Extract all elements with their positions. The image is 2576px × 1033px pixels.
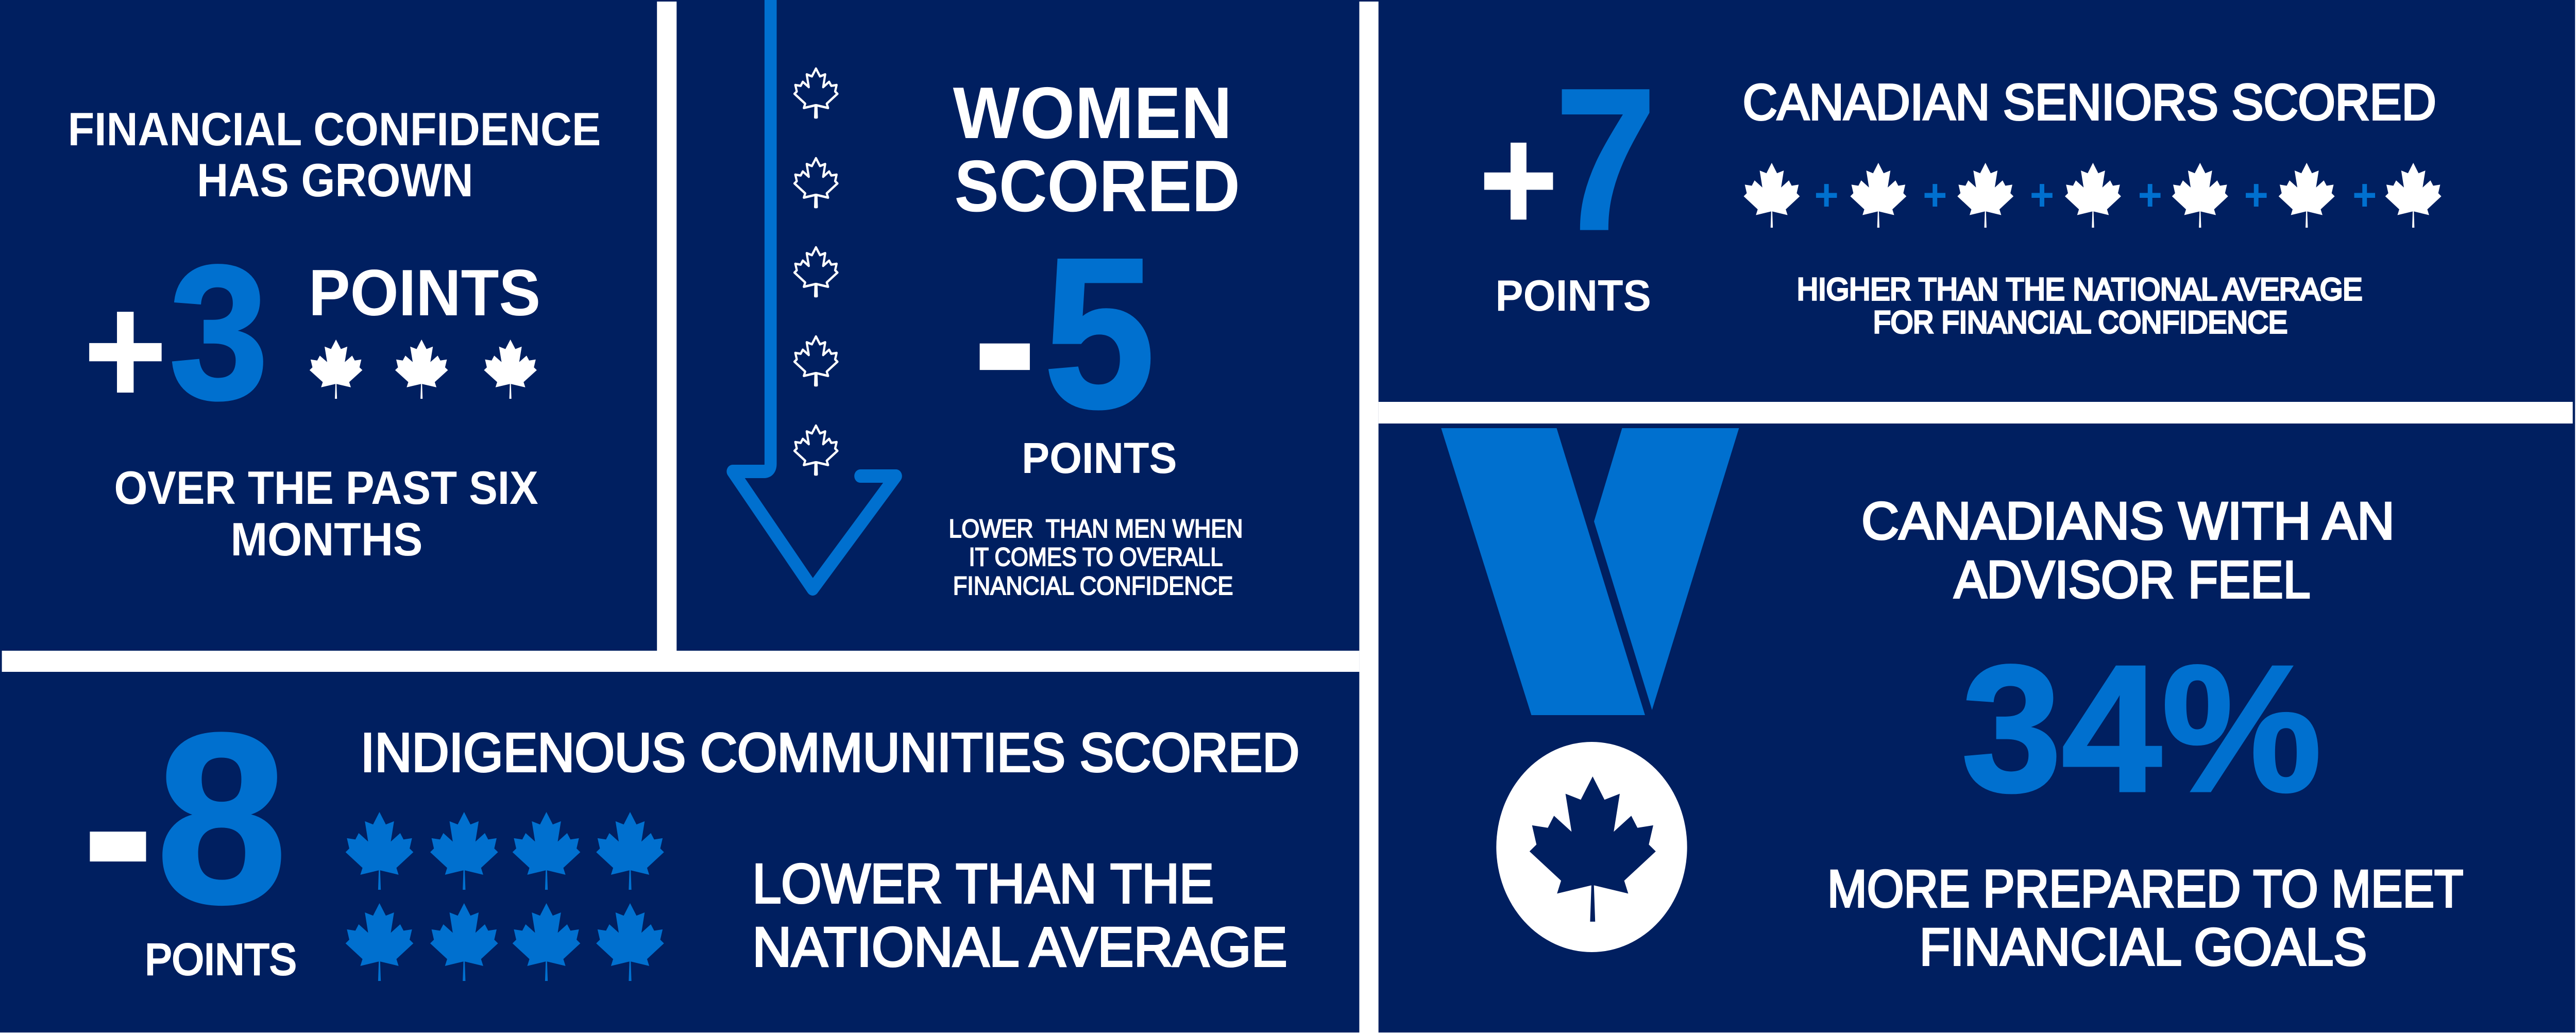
heading: women scored: SCORED — [954, 145, 1240, 227]
panel: financial confidence grown — [68, 103, 601, 566]
icon: medal ribbon — [1441, 428, 1739, 715]
plus sign: + — [1479, 95, 1558, 263]
plus sign: + — [83, 262, 167, 438]
text: higher than national average: FOR FINANCIAL CONFIDENCE — [1873, 306, 2287, 340]
points label: POINTS — [1022, 434, 1177, 482]
text: lower than the national average: LOWER THAN THE — [752, 853, 1214, 915]
figure: 34 percent: 34% — [1961, 628, 2321, 829]
text: over the past six months — [114, 462, 538, 566]
points label: POINTS — [145, 935, 296, 984]
text: more prepared to meet financial goals: MORE PREPARED TO MEET — [1827, 859, 2463, 918]
panel: women scored — [733, 0, 1243, 601]
heading: indigenous communities scored: INDIGENOUS COMMUNITIES SCORED — [361, 722, 1299, 783]
icons: outlined maple leaves — [794, 69, 838, 475]
text: more prepared to meet financial goals: FINANCIAL GOALS — [1920, 918, 2367, 976]
blue plus signs: + — [2138, 171, 2162, 220]
blue plus signs: + — [2352, 171, 2377, 220]
minus sign: - — [973, 218, 1037, 458]
text: over the past six months: OVER THE PAST SIX — [114, 462, 538, 514]
icons: three maple leaves — [310, 340, 537, 399]
number 5: 5 — [1044, 213, 1155, 452]
panel: canadian seniors — [1479, 47, 2442, 340]
icons: eight blue maple leaves — [346, 812, 664, 981]
blue plus signs: + — [1923, 171, 1947, 220]
minus sign: - — [82, 691, 155, 961]
panel: canadians with an advisor — [1441, 428, 2463, 976]
text: canadians with an advisor feel: CANADIANS WITH AN — [1861, 492, 2395, 550]
icons: seven maple leaves — [1743, 163, 2442, 228]
text: lower than men: LOWER THAN MEN WHEN — [949, 515, 1243, 544]
blue plus signs: + — [2030, 171, 2054, 220]
icon: medal disc with maple leaf — [1496, 742, 1687, 952]
text: canadians with an advisor feel: ADVISOR FEEL — [1954, 550, 2310, 609]
blue plus signs — [1815, 171, 2377, 220]
text: lower than men — [949, 515, 1243, 601]
points label: POINTS — [309, 256, 540, 329]
text: lower than men: FINANCIAL CONFIDENCE — [953, 572, 1233, 601]
heading: financial confidence has grown — [68, 103, 601, 207]
points label: POINTS — [1496, 272, 1651, 320]
text: more prepared to meet financial goals — [1827, 859, 2463, 976]
blue plus signs: + — [2244, 171, 2268, 220]
heading: financial confidence has grown: FINANCIAL CONFIDENCE — [68, 103, 601, 156]
blue plus signs: + — [1815, 171, 1839, 220]
text: higher than national average — [1797, 273, 2362, 340]
panel: indigenous communities — [82, 684, 1299, 984]
text: over the past six months: MONTHS — [230, 513, 422, 566]
text: lower than the national average — [752, 853, 1287, 978]
text: canadians with an advisor feel — [1861, 492, 2395, 609]
icon: down arrow — [733, 0, 896, 589]
heading: women scored: WOMEN — [953, 72, 1232, 154]
heading: canadian seniors scored: CANADIAN SENIORS SCORED — [1743, 74, 2436, 130]
heading: women scored — [953, 72, 1240, 227]
number 8: 8 — [156, 684, 287, 954]
heading: financial confidence has grown: HAS GROWN — [197, 154, 473, 207]
text: higher than national average: HIGHER THAN THE NATIONAL AVERAGE — [1797, 273, 2362, 307]
text: lower than men: IT COMES TO OVERALL — [969, 543, 1223, 572]
number 3: 3 — [170, 226, 268, 439]
text: lower than the national average: NATIONAL AVERAGE — [752, 916, 1287, 978]
number 7: 7 — [1555, 47, 1656, 272]
